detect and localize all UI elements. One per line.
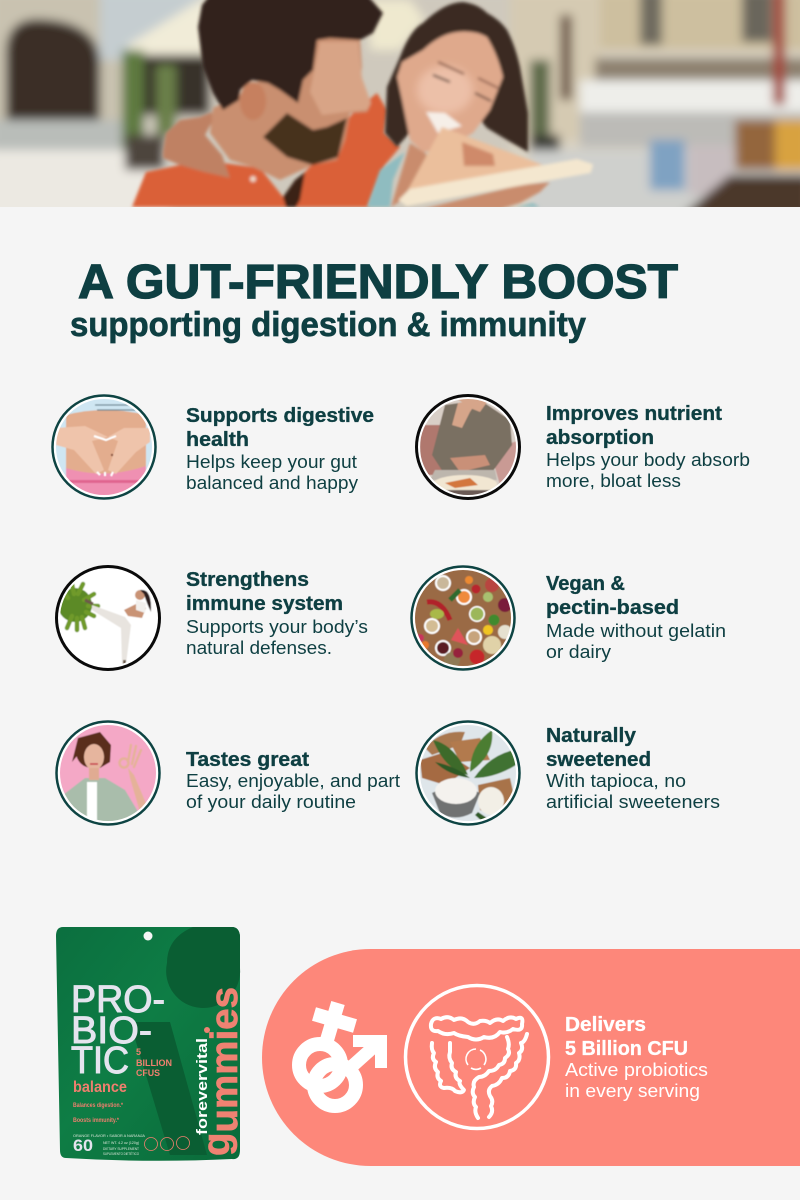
product name: PRO-: [71, 979, 165, 1021]
eyes and brows: [433, 75, 491, 101]
benefit: vegan and pectin-based: pectin-based: [546, 597, 679, 619]
pizza slice: [408, 127, 543, 190]
cfu note: 5: [136, 1047, 141, 1057]
pouch fine print: ORANGE FLAVOR • SABOR A NARANJA: [73, 1134, 146, 1138]
banner heading: [565, 1014, 688, 1060]
cfu note: [136, 1047, 172, 1078]
gummies vertical: g: [196, 1132, 238, 1156]
pouch fine print: NET WT. 4.2 oz (120g): [103, 1141, 139, 1145]
benefit: improves nutrient absorption: absorption: [546, 427, 654, 449]
description: With tapioca, no: [546, 771, 686, 791]
description: Made without gelatin: [546, 621, 726, 641]
kicking woman: [85, 590, 151, 666]
icon: intestine in circle: [406, 986, 548, 1128]
pouch claims: [73, 1102, 123, 1124]
pouch fine print: DIETARY SUPPLEMENT: [103, 1147, 140, 1151]
benefit: naturally sweetened: sweetened: [546, 749, 651, 771]
smile: [426, 112, 462, 133]
product name: [71, 979, 165, 1082]
description: Helps keep your gut: [186, 452, 357, 472]
heading: Improves nutrient: [546, 403, 722, 425]
benefit: improves nutrient absorption: [415, 395, 750, 500]
hand on shoulder: [163, 112, 230, 178]
pouch fine print: [73, 1134, 146, 1156]
hero photo: couple sharing pizza: [0, 0, 800, 217]
gummies vertical: ummies: [204, 987, 246, 1132]
description: [186, 617, 368, 658]
product name: BIO-: [71, 1010, 152, 1052]
benefit: supports digestive health: [50, 395, 374, 500]
benefit: strengthens immune system: [55, 565, 368, 670]
benefit: naturally sweetened: [415, 720, 720, 825]
description: [546, 621, 726, 662]
description: [186, 771, 400, 812]
cfu note: BILLION: [136, 1058, 172, 1068]
benefit: strengthens immune system: immune system: [186, 593, 343, 615]
product: probiotic gummies pouch: [56, 927, 246, 1161]
banner heading: Delivers: [565, 1014, 646, 1036]
teal top: [367, 152, 405, 207]
cfu note: CFUS: [136, 1068, 160, 1078]
heading: Tastes great: [186, 749, 309, 771]
heading: Supports digestive: [186, 405, 374, 427]
pouch dark shapes: [130, 927, 240, 1155]
photo circle: kick at virus: [55, 565, 165, 670]
banner: delivers 5 billion CFU: [262, 949, 800, 1166]
neck and face: [210, 38, 371, 180]
photo circle: colorful plant foods: [410, 565, 520, 670]
subtitle: supporting digestion & immunity: [70, 306, 586, 344]
banner description: in every serving: [565, 1081, 700, 1101]
description: balanced and happy: [186, 473, 358, 493]
hair: [385, 2, 528, 152]
description: Supports your body’s: [186, 617, 368, 637]
ear: [240, 82, 266, 120]
pouch fine print: SUPLEMENTO DIETÉTICO: [103, 1151, 139, 1156]
photo circle: woman with ok gesture: [55, 720, 165, 825]
pouch claims: Balances digestion.*: [73, 1102, 123, 1109]
description: [186, 452, 358, 493]
description: or dairy: [546, 642, 611, 662]
photo circle: tapioca and leaves: [415, 720, 525, 825]
description: artificial sweeteners: [546, 792, 720, 812]
benefit: vegan and pectin-based: [410, 565, 726, 670]
benefit: supports digestive health: health: [186, 429, 249, 451]
banner pill: [262, 949, 800, 1166]
photo circle: belly with heart hands: [50, 395, 160, 500]
hair: [198, 0, 383, 110]
coral dot: [204, 1027, 210, 1033]
brand name vertical: forevervital: [194, 1038, 211, 1135]
variant name: balance: [73, 1079, 127, 1096]
beard: [263, 113, 347, 165]
banner description: [565, 1060, 708, 1101]
description: more, bloat less: [546, 471, 681, 491]
description: [546, 450, 750, 491]
heading: Strengthens: [186, 569, 309, 591]
photo background: blurred street: [0, 0, 800, 217]
description: Helps your body absorb: [546, 450, 750, 470]
man: [132, 0, 400, 207]
banner description: Active probiotics: [565, 1060, 708, 1080]
product name: TIC: [71, 1040, 129, 1082]
pouch badges: [144, 1136, 190, 1150]
description: [546, 771, 720, 812]
hang hole: [144, 932, 152, 940]
photo circle: woman holding stomach: [415, 395, 525, 500]
title: A GUT-FRIENDLY BOOST: [78, 256, 678, 309]
hand holding pizza: [423, 182, 550, 209]
icon: gender symbols: [299, 1003, 387, 1106]
pouch claims: Boosts immunity.*: [73, 1117, 119, 1124]
count: 60: [73, 1136, 93, 1155]
crust: [400, 160, 592, 205]
neck: [390, 142, 428, 207]
orange shirt: [132, 93, 400, 207]
description: Easy, enjoyable, and part: [186, 771, 400, 791]
pouch body: [56, 927, 240, 1161]
heading: Naturally: [546, 725, 637, 747]
virus: [58, 584, 98, 630]
face: [397, 32, 503, 152]
circular arrows: [466, 1049, 486, 1069]
large intestine: [431, 1017, 527, 1118]
banner heading: 5 Billion CFU: [565, 1038, 688, 1060]
woman: [367, 2, 592, 209]
description: natural defenses.: [186, 638, 332, 658]
description: of your daily routine: [186, 792, 356, 812]
heading: Vegan &: [546, 573, 625, 595]
benefit: tastes great: [55, 720, 400, 825]
